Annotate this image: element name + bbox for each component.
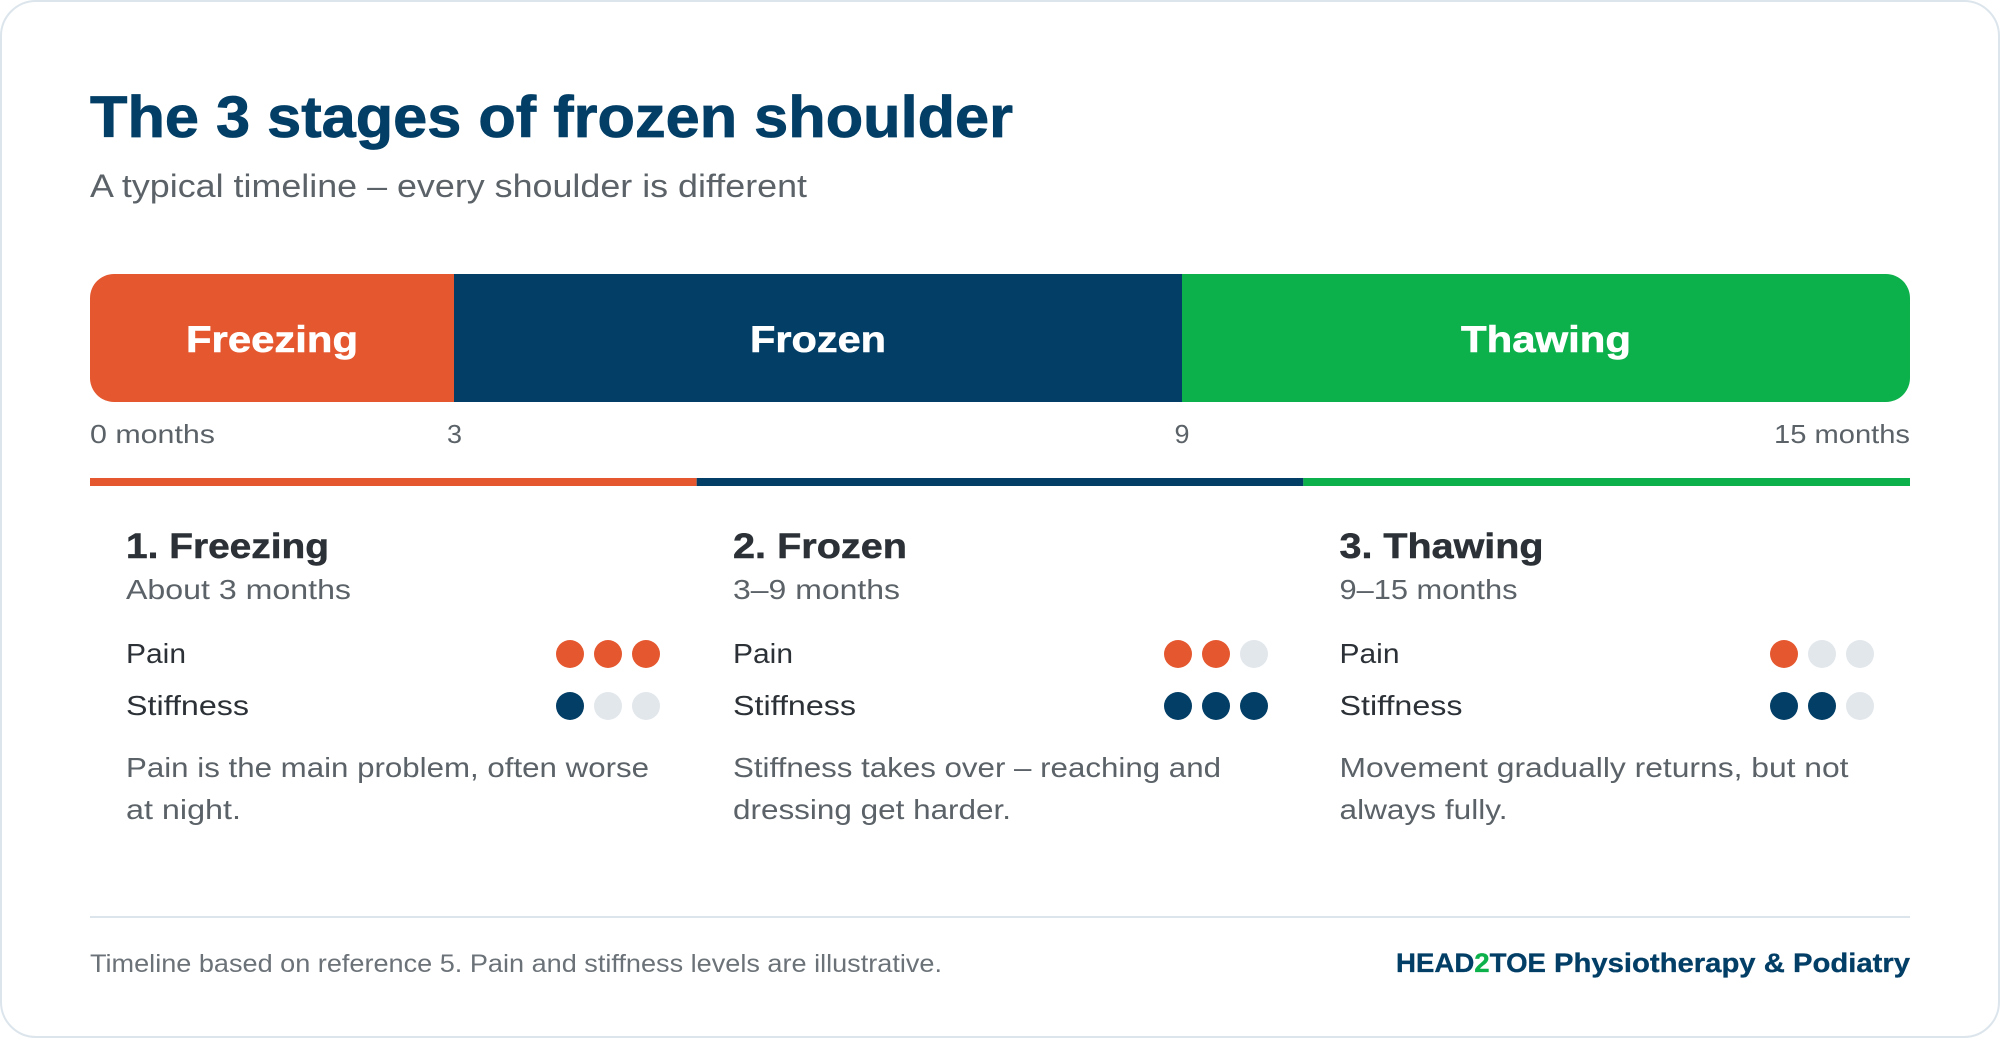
axis labels: 15 months xyxy=(1774,419,1910,449)
description: at night. xyxy=(126,794,241,825)
segment: freezing: Freezing xyxy=(186,319,358,360)
segment: thawing: Thawing xyxy=(1461,319,1631,360)
stiffness rating xyxy=(733,690,1268,721)
segment: thawing xyxy=(1182,274,1910,402)
pain rating xyxy=(733,638,1268,669)
pain rating: Pain xyxy=(126,638,186,669)
panel: freezing xyxy=(90,478,697,825)
axis labels: 9 xyxy=(1174,419,1190,449)
pain rating xyxy=(1340,638,1874,669)
axis labels xyxy=(90,419,1910,449)
segment: freezing xyxy=(90,274,454,402)
brand xyxy=(1396,948,1910,978)
stiffness rating: Stiffness xyxy=(1340,690,1462,721)
pain rating: Pain xyxy=(733,638,793,669)
subtitle: A typical timeline – every shoulder is different xyxy=(90,168,807,204)
brand: HEAD2TOE xyxy=(1396,948,1546,978)
timeline bar xyxy=(90,274,1910,402)
description: Pain is the main problem, often worse xyxy=(126,752,649,783)
stiffness rating xyxy=(126,690,660,721)
description: Stiffness takes over – reaching and xyxy=(733,752,1221,783)
description xyxy=(733,752,1221,825)
duration: 3–9 months xyxy=(733,574,900,605)
title: The 3 stages of frozen shoulder xyxy=(90,85,1013,150)
description xyxy=(1340,752,1849,825)
description xyxy=(126,752,649,825)
stiffness rating: Stiffness xyxy=(126,690,249,721)
panel: thawing xyxy=(1303,478,1910,825)
heading: 1. Freezing xyxy=(126,527,329,566)
description: Movement gradually returns, but not xyxy=(1340,752,1849,783)
duration: About 3 months xyxy=(126,574,351,605)
description: dressing get harder. xyxy=(733,794,1011,825)
pain rating xyxy=(126,638,660,669)
heading: 3. Thawing xyxy=(1340,527,1544,566)
stiffness rating xyxy=(1340,690,1874,721)
heading: 2. Frozen xyxy=(733,527,907,566)
segment: frozen: Frozen xyxy=(750,319,886,360)
brand: Physiotherapy & Podiatry xyxy=(1554,948,1910,978)
stiffness rating: Stiffness xyxy=(733,690,856,721)
segment: frozen xyxy=(454,274,1182,402)
description: always fully. xyxy=(1340,794,1508,825)
pain rating: Pain xyxy=(1340,638,1400,669)
footnote: Timeline based on reference 5. Pain and stiffness levels are illustrative. xyxy=(90,950,942,978)
axis labels: 0 months xyxy=(90,419,215,449)
axis labels: 3 xyxy=(447,419,462,449)
duration: 9–15 months xyxy=(1340,574,1518,605)
panel: frozen xyxy=(697,478,1303,825)
